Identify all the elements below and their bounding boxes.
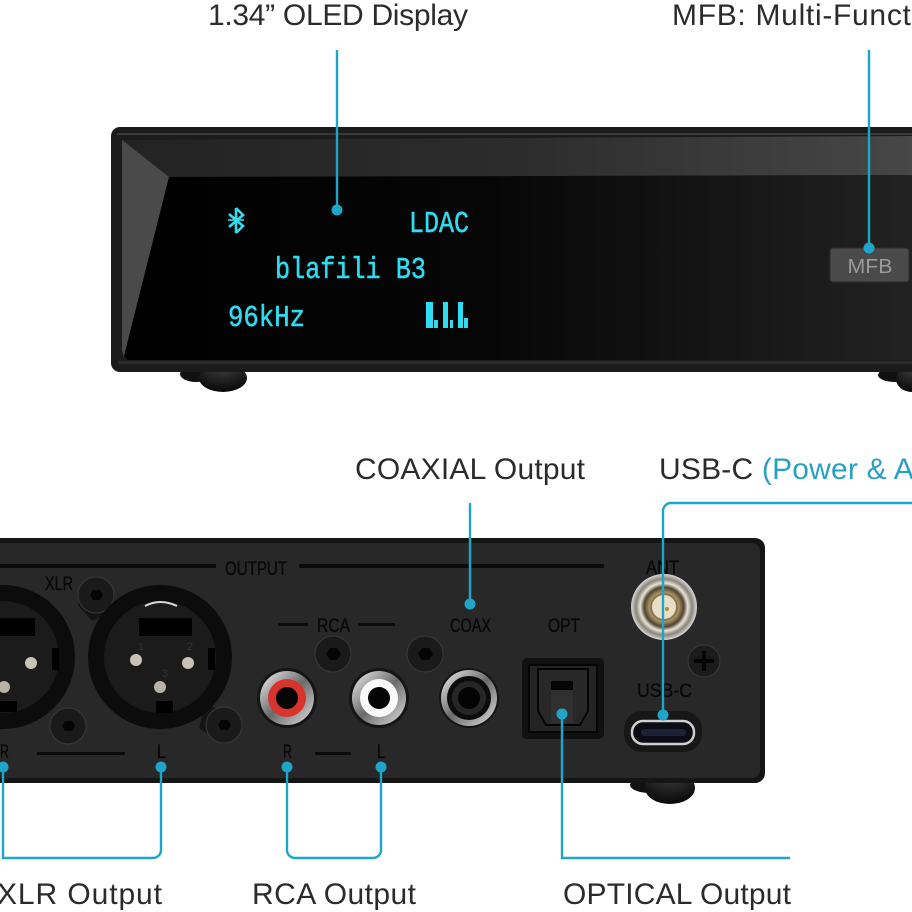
device body [111, 127, 912, 372]
screen text: device name: blafili B3 [275, 253, 426, 288]
screen icon: bluetooth [228, 208, 244, 233]
rear foot [630, 772, 695, 804]
XLR bottom label row: L [157, 742, 166, 763]
phillips screw [688, 645, 720, 677]
rear body [0, 538, 765, 783]
XLR screws [78, 577, 114, 613]
callout: optical [556, 708, 792, 911]
RCA bottom labels: L [377, 742, 385, 763]
RCA jack coaxial [439, 668, 499, 728]
RCA heading [278, 616, 395, 637]
screen icon: level meter [426, 302, 468, 328]
callout: RCA [252, 762, 417, 911]
rear panel device [0, 538, 765, 804]
USB-C port [624, 711, 702, 752]
RCA bottom labels [283, 742, 385, 763]
device foot right [878, 366, 912, 392]
left bevel [122, 140, 169, 358]
callout: RCA: RCA Output [252, 878, 417, 911]
screen text: sample rate: 96kHz [228, 301, 305, 336]
RCA screws [315, 636, 351, 672]
output heading with rules: OUTPUT [225, 559, 287, 580]
XLR label: XLR [45, 574, 73, 595]
output heading with rules [0, 559, 604, 580]
USB-C label: USB-C [637, 681, 692, 702]
OLED screen [124, 175, 912, 360]
XLR bottom label row: R [0, 742, 9, 763]
XLR connector left channel: 3 [162, 668, 168, 680]
XLR connector left channel: 2 [187, 641, 193, 653]
MFB button [830, 248, 909, 282]
antenna connector [631, 558, 697, 640]
callout: OLED display [208, 0, 468, 216]
top bevel [122, 136, 912, 177]
MFB button: MFB [848, 256, 892, 278]
callout: optical: OPTICAL Output [563, 878, 792, 911]
XLR connector left channel [88, 585, 242, 744]
RCA heading: RCA [317, 616, 350, 637]
RCA jack red [257, 668, 317, 728]
antenna connector: ANT [646, 558, 679, 579]
XLR screw lower [50, 708, 86, 744]
RCA jack white [349, 668, 409, 728]
callout: coaxial: COAXIAL Output [355, 453, 586, 486]
callout: MFB [672, 0, 912, 254]
XLR connector right channel (partial) [0, 577, 122, 729]
COAX label: COAX [450, 616, 491, 637]
XLR bottom label row [0, 742, 166, 763]
callout: USB-C [658, 453, 912, 720]
screen text: LDAC: LDAC [409, 207, 469, 242]
RCA bottom labels: R [283, 742, 292, 763]
device foot left [180, 364, 247, 392]
OPT label: OPT [548, 616, 580, 637]
callout: XLR: XLR Output [0, 878, 163, 911]
callout: XLR [0, 762, 166, 911]
front panel device [111, 127, 912, 392]
callout: coaxial [355, 453, 586, 610]
optical port [522, 658, 604, 739]
XLR connector left channel: 1 [138, 641, 144, 653]
